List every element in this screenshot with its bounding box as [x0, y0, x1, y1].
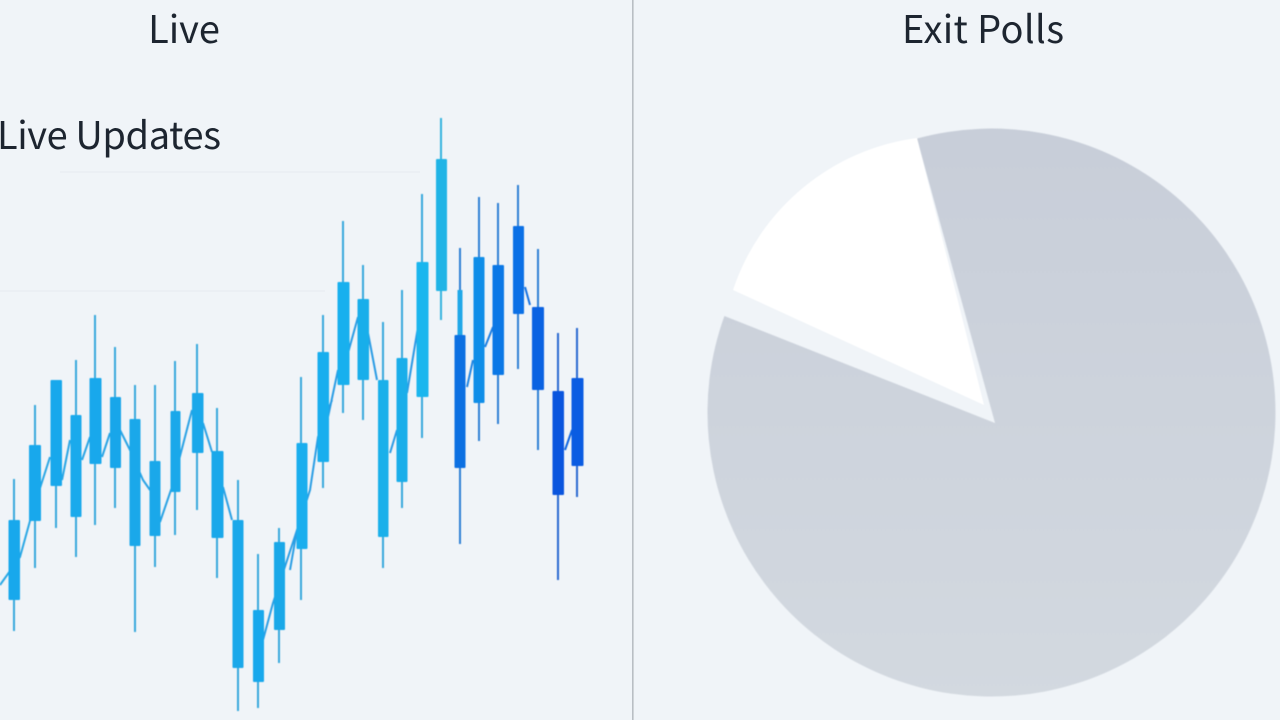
heading: Live: Live: [148, 0, 220, 54]
candle wicks: [14, 118, 577, 711]
candlestick chart: [0, 118, 584, 711]
pie slice: grey majority: [707, 129, 1275, 697]
faint gridlines: [0, 172, 420, 291]
trend line: [0, 287, 572, 640]
pie chart: [707, 129, 1275, 697]
divider between panels: [632, 0, 634, 720]
heading: Exit Polls: Exit Polls: [902, 0, 1064, 54]
pie slice: white minority: [733, 138, 984, 405]
candle bodies: [8, 159, 584, 682]
subheading: Live Updates: Live Updates: [0, 105, 221, 160]
